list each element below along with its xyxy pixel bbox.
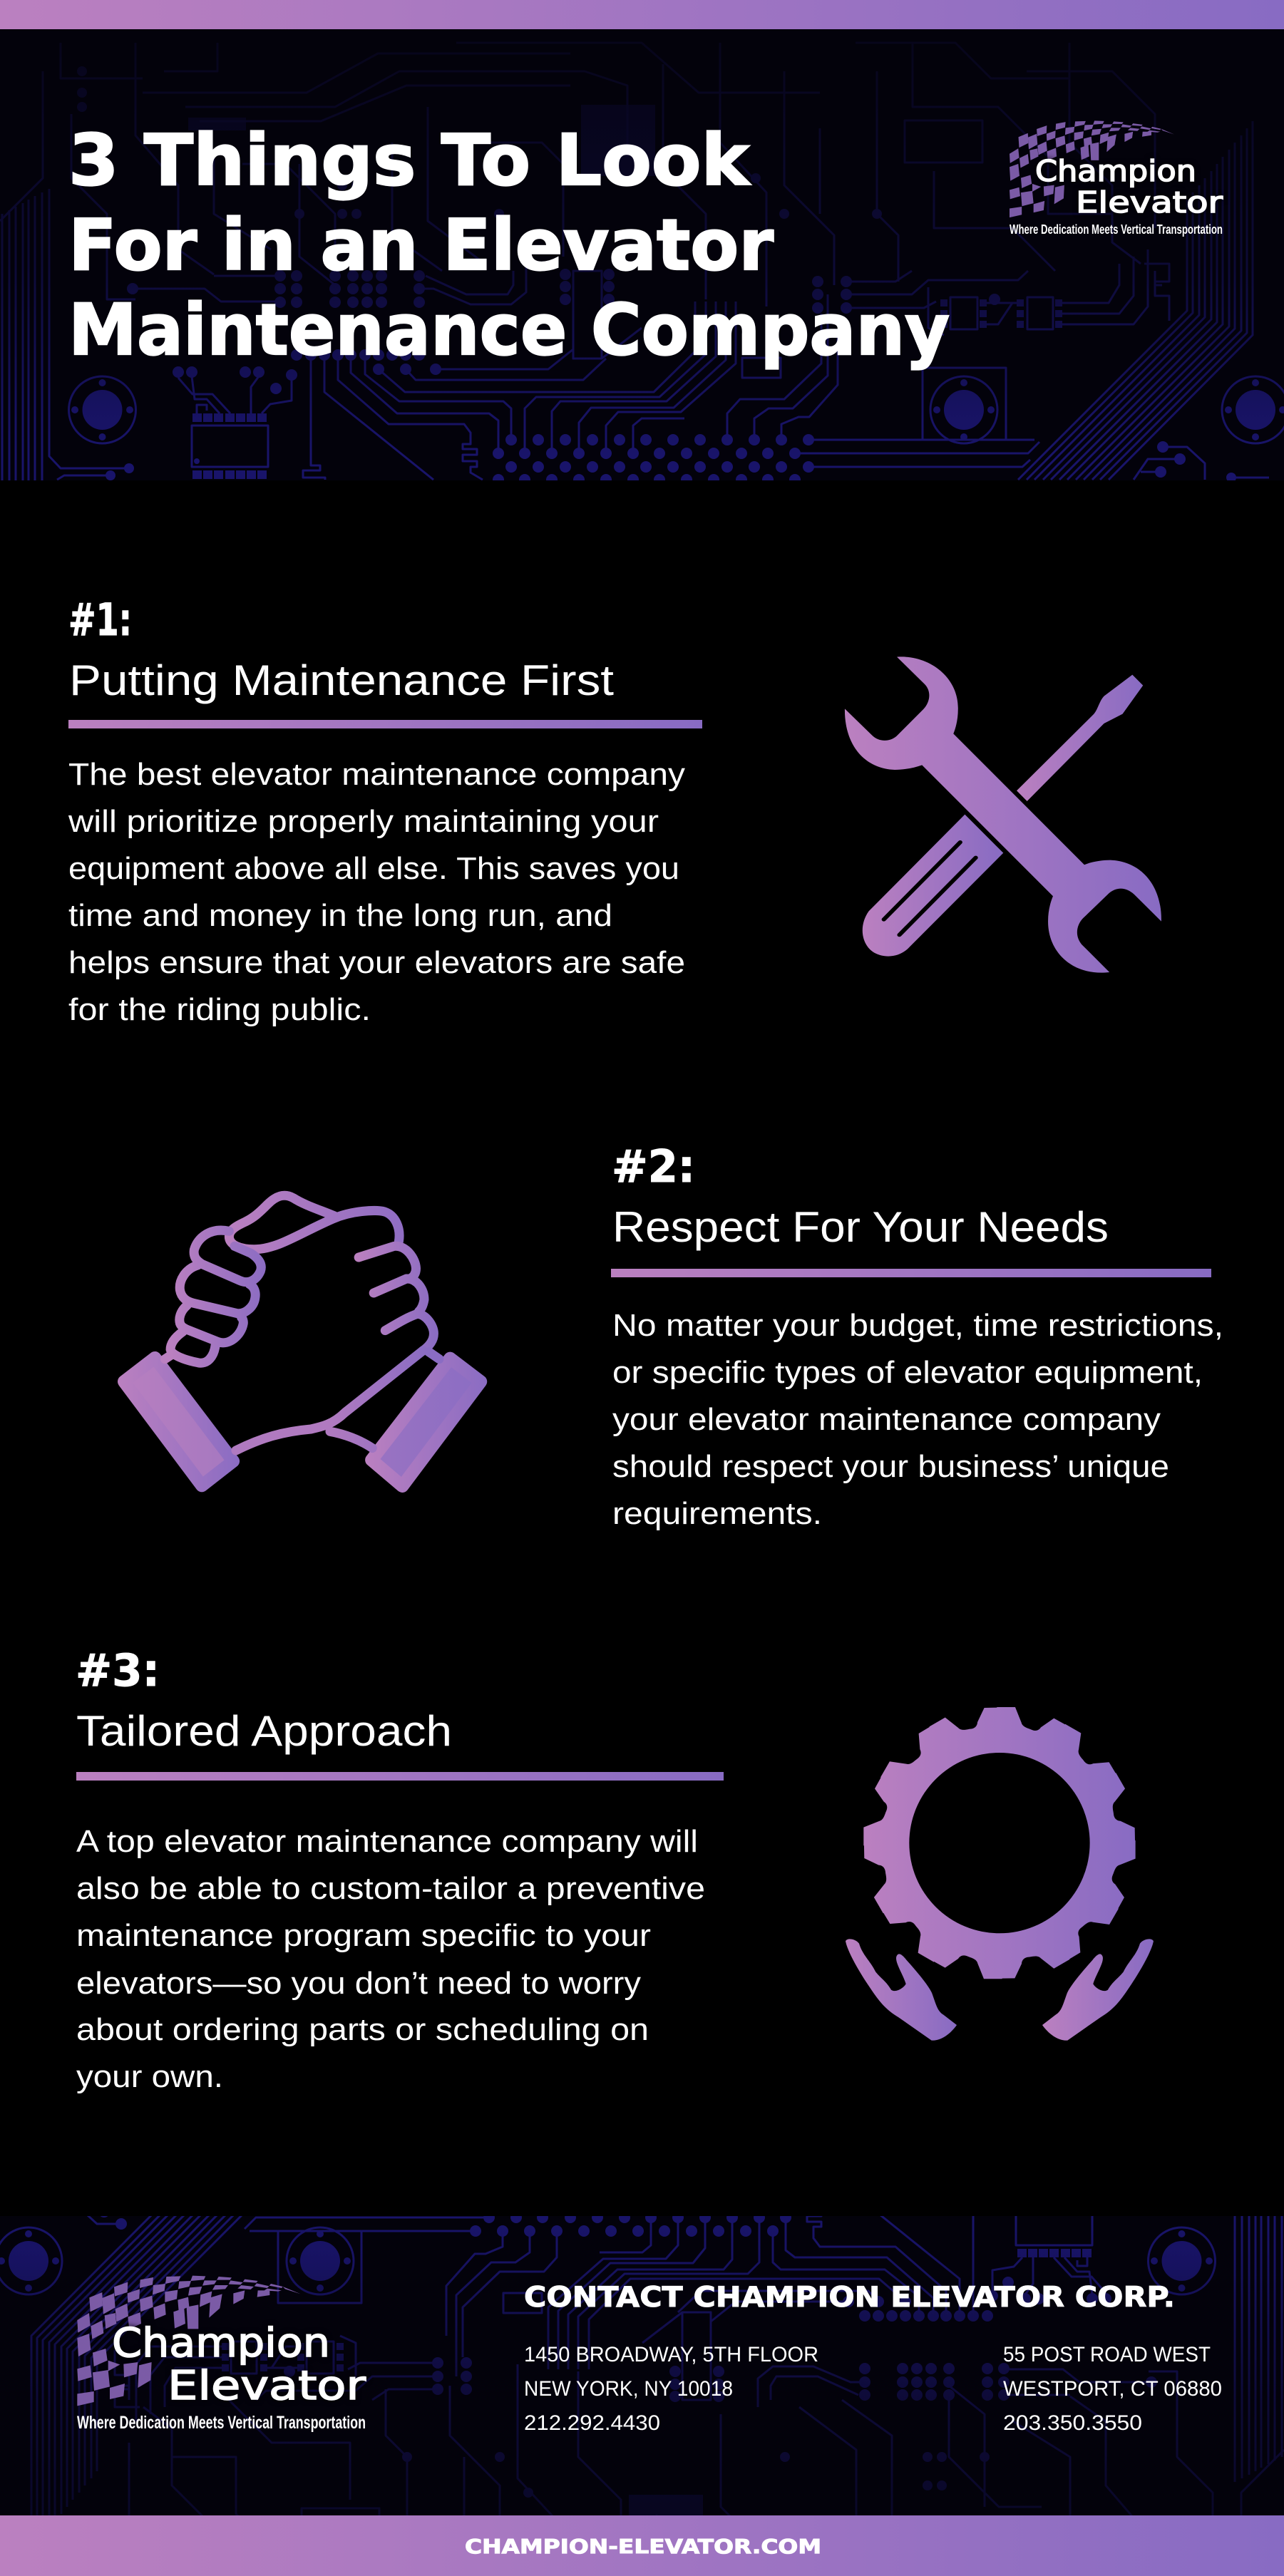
bottom gradient bar [0,2515,1284,2576]
footer circuit board background [0,2216,1284,2515]
body text [612,1308,1223,1531]
top gradient bar [0,0,1284,29]
panel: #3 Tailored Approach [76,1644,724,2094]
Westport address: WESTPORT, CT 06880 [1003,2377,1222,2401]
screwdriver handle [863,815,1003,957]
body text: will prioritize properly maintaining your [68,804,659,839]
wrench [845,656,1161,973]
footer logo: Champion Elevator: Where Dedication Meets Vertical Transportation [77,2413,366,2433]
gradient rule [68,720,702,728]
body text: your own. [76,2059,223,2094]
body text: A top elevator maintenance company will [76,1824,698,1859]
gradient rule [76,1772,724,1781]
body text: maintenance program specific to your [76,1918,651,1953]
Westport address: 55 POST ROAD WEST [1003,2343,1211,2366]
footer logo: Champion Elevator: Champion [112,2320,330,2366]
New York address: NEW YORK, NY 10018 [524,2377,733,2401]
New York address [524,2343,818,2435]
website link: CHAMPION-ELEVATOR.COM [465,2535,821,2558]
panel: #1 Putting Maintenance First [68,594,702,1027]
body text: about ordering parts or scheduling on [76,2012,649,2047]
left hand [846,1939,957,2041]
screwdriver tip [1017,675,1143,801]
title: Maintenance Company [68,289,950,371]
heading: Respect For Your Needs [612,1203,1109,1251]
gradient rule [611,1269,1211,1277]
title [68,120,950,371]
body text: No matter your budget, time restrictions, [612,1308,1223,1343]
header logo: Champion Elevator [1010,120,1223,237]
forearms [236,1351,439,1451]
right hand fingers [359,1246,433,1351]
contact heading: CONTACT CHAMPION ELEVATOR CORP. [524,2282,1175,2314]
header logo: Champion Elevator: Elevator [1076,185,1223,220]
body text: helps ensure that your elevators are safe [68,945,685,980]
right cuff [371,1359,481,1486]
panel: #2 Respect For Your Needs [611,1140,1223,1531]
Westport address: 203.350.3550 [1003,2411,1142,2435]
body text [68,757,685,1027]
body text: requirements. [612,1496,822,1531]
gear [863,1706,1136,1980]
icon: handshake [124,1195,481,1486]
body text: equipment above all else. This saves you [68,851,679,886]
heading: Tailored Approach [76,1707,452,1755]
header circuit board background [0,29,1284,485]
left hand fingers [165,1230,261,1363]
body text: or specific types of elevator equipment, [612,1355,1203,1390]
number #3: #3: [76,1644,160,1696]
body text: your elevator maintenance company [612,1402,1161,1437]
body text: also be able to custom-tailor a preventive [76,1871,705,1906]
header logo: Champion Elevator: Champion [1035,154,1196,188]
gripping thumb and hand top [229,1195,399,1250]
body text: elevators—so you don’t need to worry [76,1966,641,2001]
heading: Putting Maintenance First [69,656,614,704]
icon: wrench and screwdriver [845,656,1161,973]
body text: should respect your business’ unique [612,1449,1169,1484]
number #2: #2: [612,1140,695,1192]
icon: gear held by two hands [846,1706,1154,2041]
Westport address [1003,2343,1222,2435]
New York address: 1450 BROADWAY, 5TH FLOOR [524,2343,818,2366]
right hand [1042,1939,1154,2041]
body text [76,1824,705,2094]
body text: for the riding public. [68,992,371,1027]
footer logo: Champion Elevator: Elevator [168,2363,366,2409]
left cuff [124,1358,233,1485]
title: 3 Things To Look [68,120,751,202]
number #1: #1: [68,594,132,646]
footer logo: Champion Elevator [77,2276,366,2433]
body text: time and money in the long run, and [68,898,612,933]
body text: The best elevator maintenance company [68,757,685,792]
title: For in an Elevator [68,205,774,287]
New York address: 212.292.4430 [524,2411,660,2435]
